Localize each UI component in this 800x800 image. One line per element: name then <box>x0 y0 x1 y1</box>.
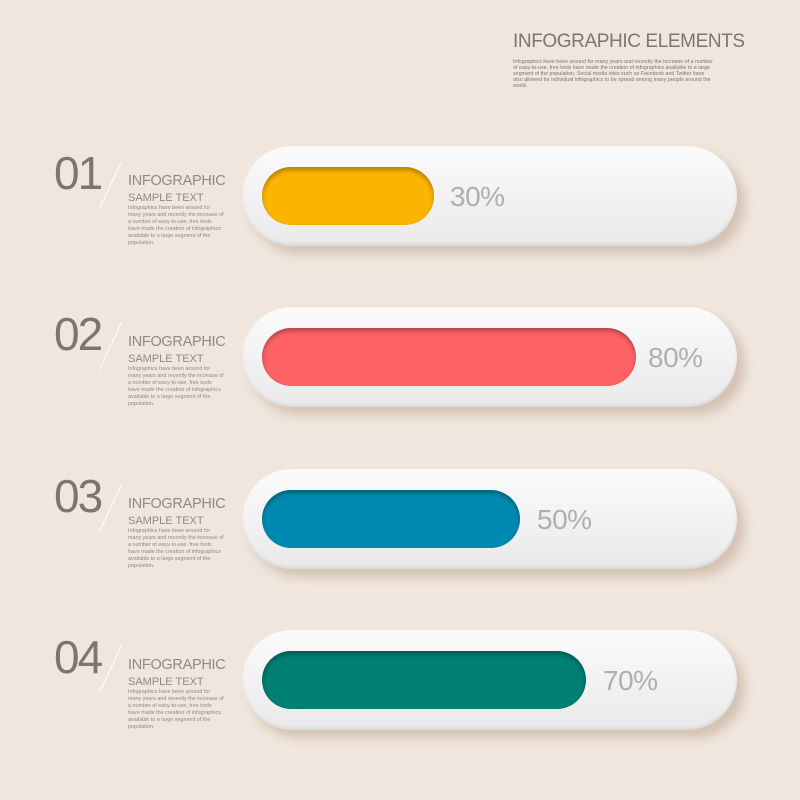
number 04: 04 <box>54 631 101 683</box>
label: SAMPLE TEXT <box>128 676 204 688</box>
number 03: 03 <box>54 470 101 522</box>
label <box>128 496 226 568</box>
row 1 <box>54 146 749 258</box>
pill with 30% bar: 30% <box>450 181 505 212</box>
label <box>128 334 226 406</box>
pill with 80% bar <box>242 307 737 407</box>
label: INFOGRAPHIC <box>128 496 225 512</box>
row 2 <box>54 307 749 420</box>
label: Infographics have been around for many years and recently the increase of a number of easy-to-use, free tools have made the creation of infographics available to a large segment of the population. <box>128 366 224 406</box>
row 3 <box>54 469 749 582</box>
pill with 30% bar <box>242 146 737 246</box>
pill with 70% bar <box>242 630 737 730</box>
pill with 50% bar <box>242 469 737 569</box>
label <box>128 173 226 246</box>
pill with 50% bar: 50% <box>537 504 592 535</box>
label: INFOGRAPHIC <box>128 657 225 673</box>
label: SAMPLE TEXT <box>128 192 204 204</box>
label <box>128 657 226 730</box>
pill with 80% bar: 80% <box>648 342 703 373</box>
label: INFOGRAPHIC <box>128 173 225 189</box>
pill with 70% bar: 70% <box>603 665 658 696</box>
label: SAMPLE TEXT <box>128 352 204 364</box>
label: Infographics have been around for many years and recently the increase of a number of easy-to-use, free tools have made the creation of infographics available to a large segment of the population. <box>128 688 224 730</box>
label: SAMPLE TEXT <box>128 514 204 526</box>
label: INFOGRAPHIC <box>128 334 225 350</box>
label: Infographics have been around for many years and recently the increase of a number of easy-to-use, free tools have made the creation of infographics available to a large segment of the population. <box>128 204 224 246</box>
number 02: 02 <box>54 308 101 360</box>
label: Infographics have been around for many years and recently the increase of a number of easy-to-use, free tools have made the creation of infographics available to a large segment of the population. <box>128 528 224 568</box>
number 01: 01 <box>54 147 101 199</box>
row 4 <box>54 630 749 742</box>
title: INFOGRAPHIC ELEMENTS <box>513 31 745 52</box>
intro text: Infographics have been around for many years and recently the increase of a number of easy-to-use, free tools have made the creation of infographics available to a large segment of the population. Social media sites such as Facebook and Twitter have also allowed for individual infographics to be spread among many people around the world. <box>513 59 713 89</box>
